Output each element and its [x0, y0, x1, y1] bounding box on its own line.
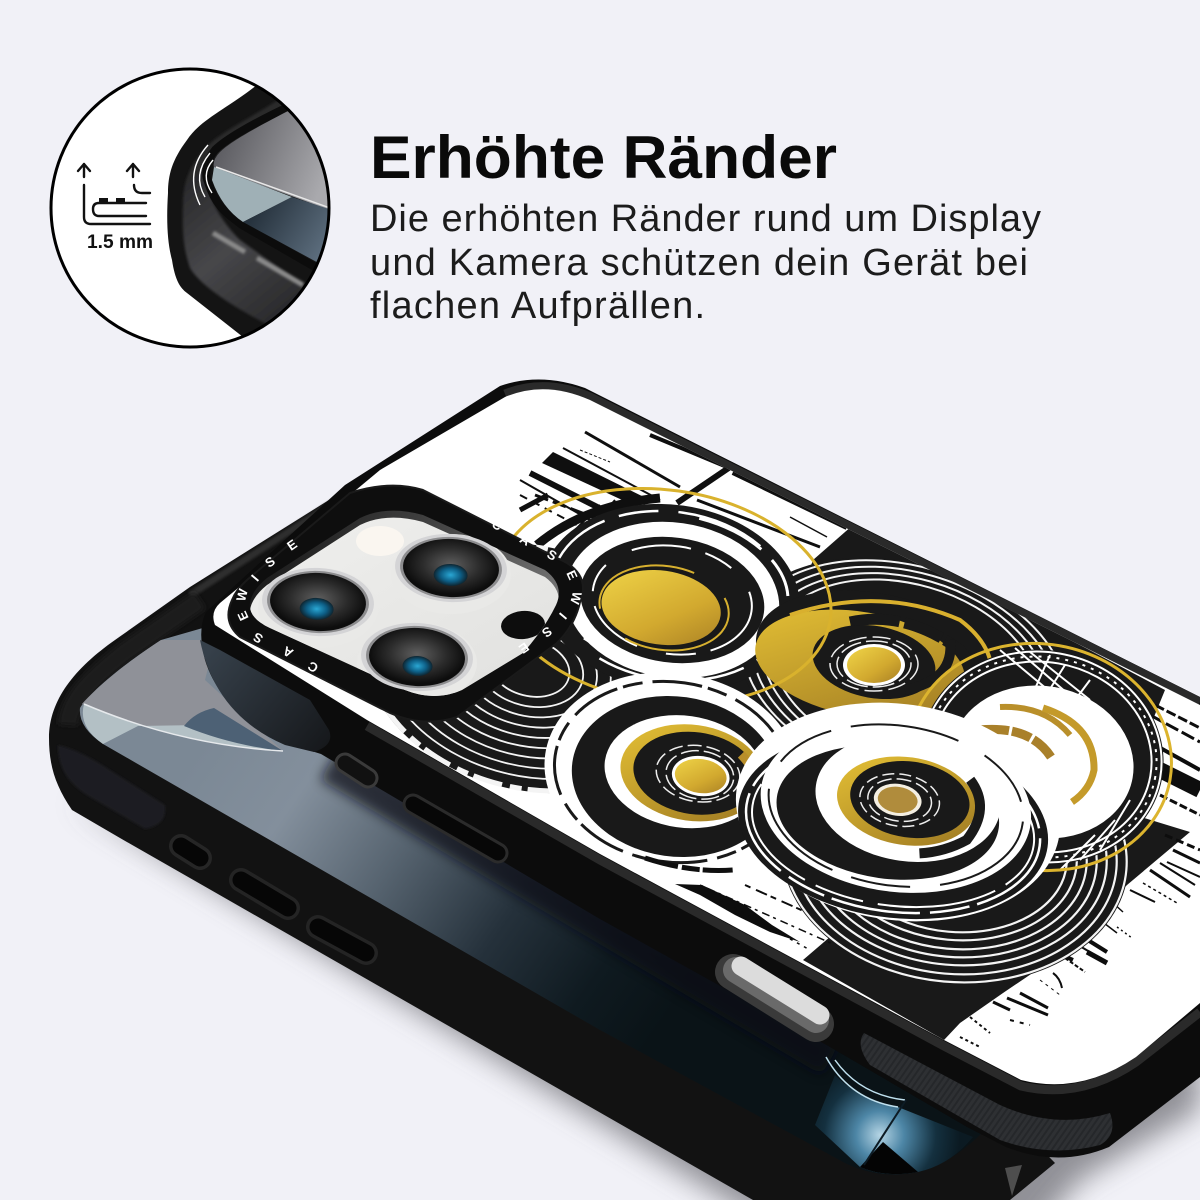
ring lettering CASEWISE: E: [234, 609, 252, 623]
body text: und Kamera schützen dein Gerät bei: [370, 242, 1028, 284]
screen dark blue curve: [184, 708, 283, 751]
lens bumps: [453, 534, 507, 560]
screen white line: [216, 167, 330, 208]
phone camera blocks: [99, 198, 125, 203]
ring lettering CASEWISE: S: [544, 546, 560, 564]
front side button: [413, 804, 498, 853]
circle outline: [51, 69, 329, 347]
body text: [370, 198, 1041, 327]
camera ring: [228, 486, 583, 722]
circle background: [51, 69, 329, 347]
arrow right: [127, 164, 139, 177]
frame translucent band: [183, 97, 310, 325]
black field between swirls: [727, 679, 782, 728]
back phone volume up button: [241, 880, 288, 908]
swirl 4 lower brush mark: [645, 858, 750, 870]
front phone body: [201, 379, 1200, 1158]
ring lettering CASEWISE: I: [556, 610, 570, 622]
ring lettering CASEWISE: C: [305, 658, 321, 676]
USB port: [733, 966, 820, 1024]
front phone rim: [367, 387, 1200, 1090]
ring lettering CASEWISE: [233, 516, 585, 676]
back phone volume down button: [318, 927, 366, 953]
top brush stripes: [520, 432, 847, 558]
ring lettering CASEWISE: S: [539, 623, 555, 641]
screen light band: [212, 167, 292, 222]
black block bottom: [803, 813, 1190, 1040]
frame: [167, 86, 319, 336]
screen dark: [243, 197, 328, 262]
right stripes: [1150, 705, 1200, 850]
swirl 4 lower left: [544, 674, 782, 864]
inner black rim: [206, 106, 320, 270]
front phone: [200, 379, 1200, 1158]
front action switch: [345, 763, 368, 778]
phone shadow: [70, 800, 1200, 1200]
screen glow arcs: [826, 1057, 905, 1107]
ring lettering CASEWISE: S: [250, 629, 266, 647]
hatch arcs upper left of swirl: [537, 498, 660, 545]
back phone frame: [49, 468, 1055, 1200]
ring lettering CASEWISE: W: [233, 586, 251, 603]
shadow under front phone: [329, 765, 830, 1060]
body text: Die erhöhten Ränder rund um Display: [370, 198, 1041, 240]
paint splatter lower right: [960, 850, 1200, 1047]
swirl 1 with gold disc: [554, 504, 798, 680]
icon: raised lip diagram: [78, 164, 150, 224]
camera lip: [134, 185, 150, 193]
black strip left of block: [675, 884, 800, 942]
concentric lines lower left: [385, 544, 612, 794]
case artwork: [200, 370, 1200, 1100]
frame highlight: [213, 233, 303, 285]
ring lettering CASEWISE: A: [280, 643, 296, 661]
screen bottom glow: [815, 1075, 973, 1174]
zoomed phone corner: [167, 86, 328, 336]
side pad near camera: [200, 640, 330, 752]
ring lettering CASEWISE: E: [563, 568, 581, 582]
camera inner wall: [250, 511, 559, 696]
ring lettering CASEWISE: S: [262, 553, 278, 571]
body text: flachen Aufprällen.: [370, 285, 705, 327]
lens top right: [393, 531, 509, 605]
screen upper wedge: [82, 640, 283, 751]
ring lettering CASEWISE: I: [248, 572, 262, 584]
carbon pad on corner: [58, 745, 165, 829]
arrow left: [78, 164, 90, 177]
swirl 5 big center: [736, 702, 1059, 922]
case outline: [84, 185, 150, 224]
screen light band: [83, 704, 283, 751]
ring lettering CASEWISE: A: [517, 531, 533, 549]
mic hole: [501, 610, 545, 640]
ring lettering CASEWISE: W: [567, 590, 585, 607]
screen upper: [214, 110, 335, 210]
screen white line: [84, 704, 283, 751]
back phone screen: [80, 600, 985, 1175]
back phone transparent edge: [1005, 1165, 1022, 1196]
camera bump: [228, 486, 585, 722]
back phone: [49, 468, 1055, 1200]
phone outline: [93, 203, 146, 216]
lens bottom: [359, 620, 475, 694]
thin gold ring: [514, 487, 832, 697]
swirl 2 gold: [755, 593, 992, 710]
title: Erhöhte Ränder: [370, 124, 837, 191]
back phone top edge highlight: [190, 486, 360, 595]
black field right: [811, 529, 1165, 716]
icon label: 1.5 mm: [87, 232, 153, 253]
back phone mute button: [181, 846, 200, 858]
impact arcs: [194, 145, 213, 205]
concentric lines right: [748, 559, 1054, 726]
ring lettering CASEWISE: E: [284, 536, 300, 554]
lens left: [260, 565, 376, 639]
concentric lines bottom: [788, 838, 1128, 984]
ring lettering CASEWISE: C: [489, 516, 505, 534]
flash: [356, 526, 404, 556]
ring lettering CASEWISE: E: [516, 639, 532, 657]
pad at front corner: [861, 1033, 1112, 1150]
camera plate: [250, 518, 559, 703]
white base: [200, 370, 1200, 1100]
screen black triangle: [860, 1142, 918, 1174]
screen glow ray: [864, 1100, 906, 1165]
swirl 3 right with gold arcs: [918, 642, 1173, 872]
callout circle: raised edge detail: [51, 60, 340, 347]
back phone rim highlight: [68, 600, 200, 725]
